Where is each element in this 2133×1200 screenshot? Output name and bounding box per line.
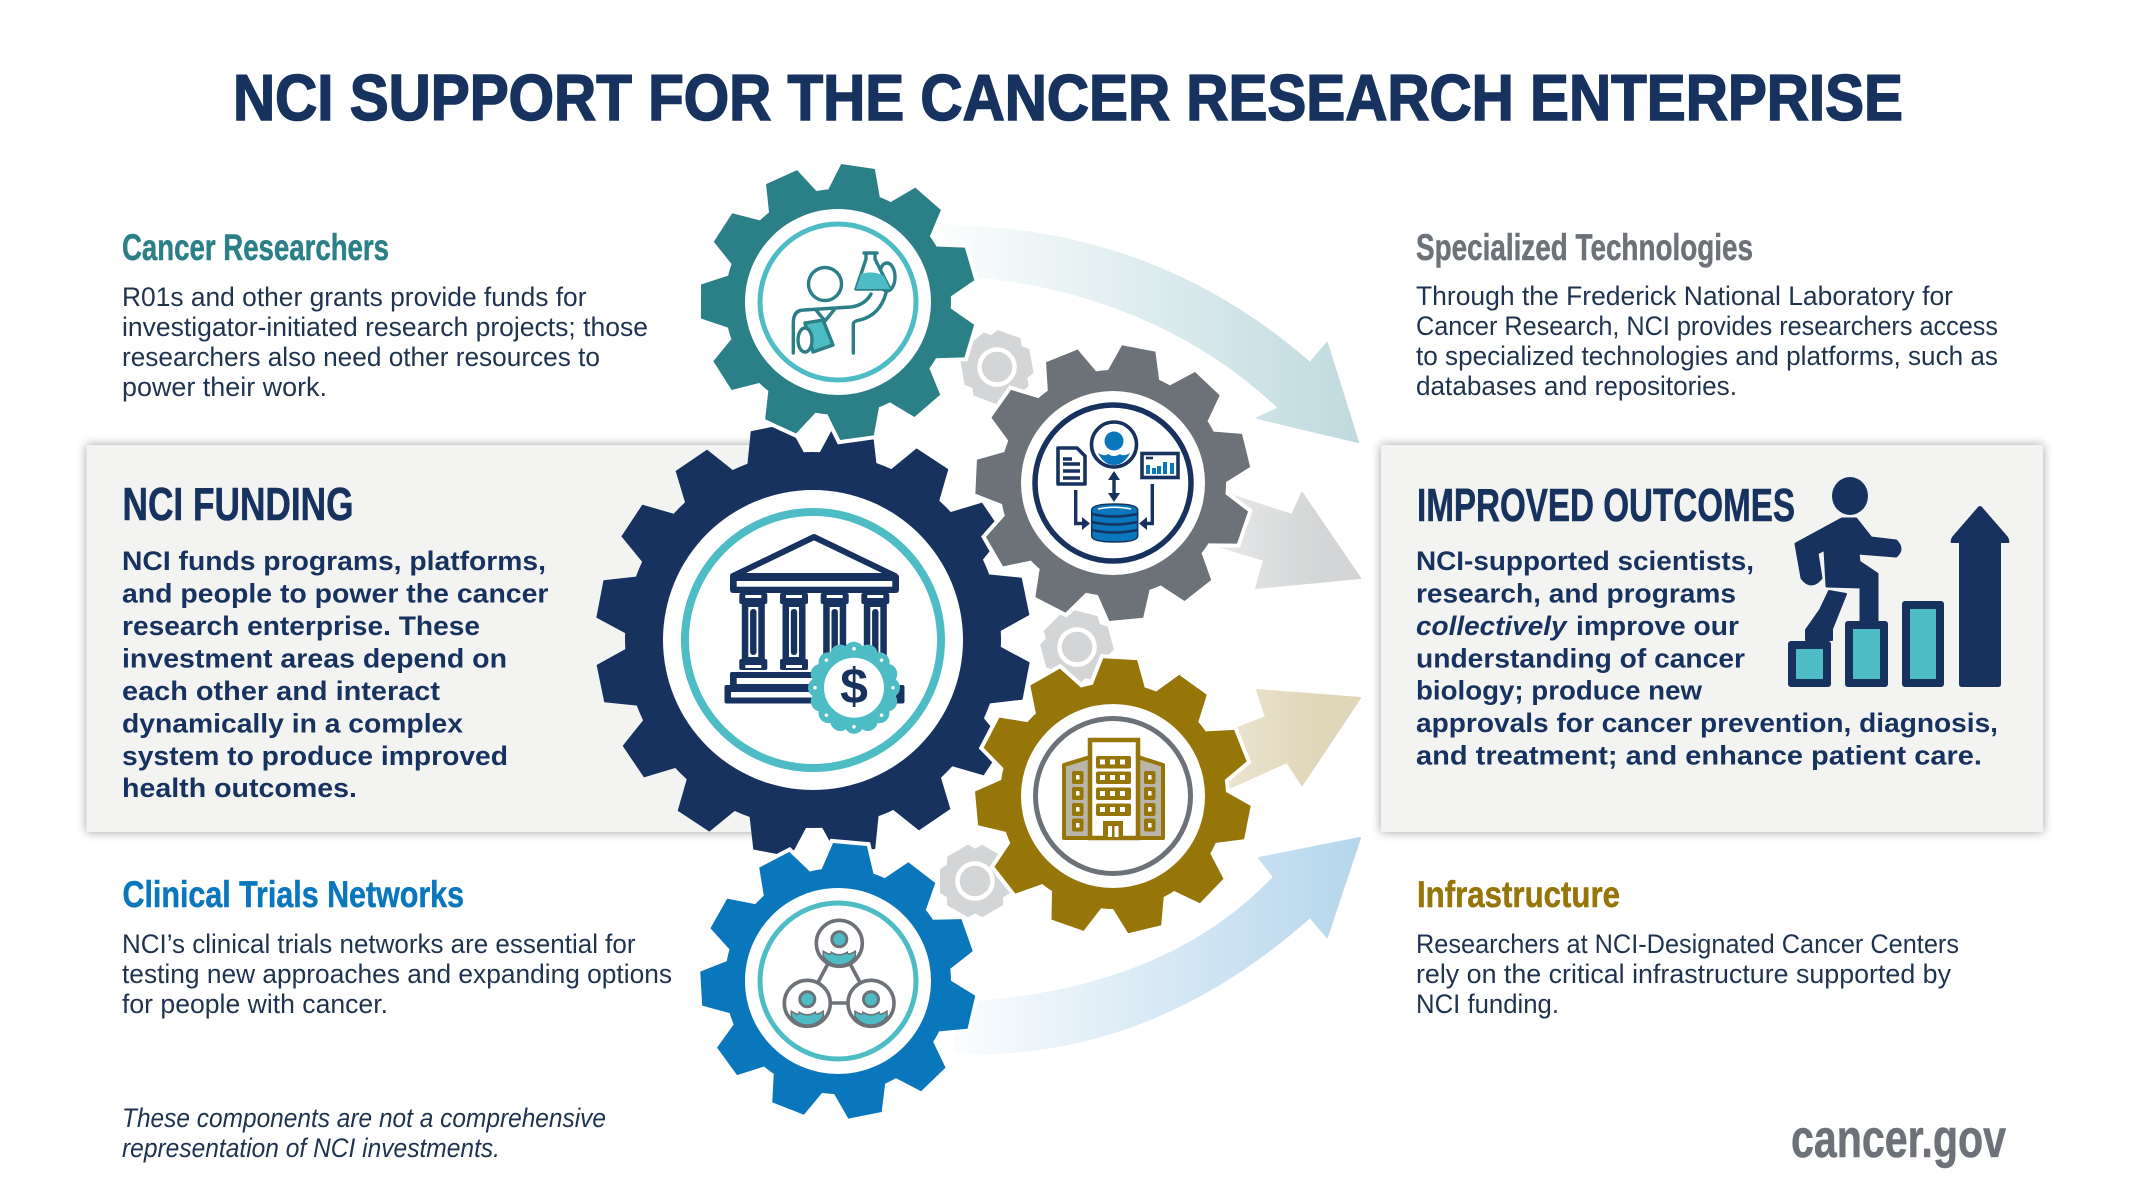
small gear 2 [1030, 603, 1124, 691]
icon: researcher with flask [793, 253, 895, 353]
icon: data sharing [1058, 422, 1178, 542]
icon: network of people [784, 920, 894, 1026]
text block: clinical trials networks: for people with cancer. [122, 989, 388, 1019]
text block: infrastructure: Researchers at NCI-Designated Cancer Centers [1416, 929, 1959, 959]
side wings [1064, 757, 1163, 838]
person head [1832, 477, 1868, 515]
text block: NCI funding: each other and interact [122, 676, 440, 706]
gear: NCI funding [559, 386, 1067, 894]
text block: specialized technologies: Through the Frederick National Laboratory for [1416, 281, 1953, 311]
logo text: cancer.gov: cancer.gov [1791, 1109, 2006, 1169]
bar 3 [1902, 601, 1944, 687]
up arrow [1951, 506, 2009, 687]
gear: cancer researchers [680, 146, 996, 460]
panel: NCI funding [86, 445, 786, 832]
document [1058, 448, 1085, 484]
wing windows [1072, 771, 1156, 832]
gear: specialized technologies [950, 322, 1276, 645]
heading: NCI funding: NCI FUNDING [122, 478, 354, 530]
small gear 3 [923, 831, 1027, 931]
steps [724, 672, 904, 704]
text block: clinical trials networks [122, 874, 672, 1019]
columns [739, 593, 889, 670]
bar 2 [1845, 621, 1888, 687]
text block: infrastructure [1416, 874, 1959, 1019]
heading: improved outcomes: IMPROVED OUTCOMES [1417, 479, 1795, 531]
text block: clinical trials networks: testing new approaches and expanding options [122, 959, 672, 989]
dollar badge [808, 641, 900, 734]
panel: improved outcomes [1381, 445, 2043, 832]
text block: NCI funding: health outcomes. [122, 773, 357, 803]
arrow: gold to outcomes [1200, 690, 1360, 790]
gear: clinical trials networks [687, 832, 989, 1131]
heading: specialized technologies: Specialized Technologies [1416, 227, 1753, 268]
text block: specialized technologies: databases and repositories. [1416, 371, 1737, 401]
arrows [1076, 473, 1152, 524]
text block: clinical trials networks: NCI’s clinical trials networks are essential for [122, 929, 636, 959]
database [1092, 504, 1138, 542]
text block: cancer researchers: R01s and other grants provide funds for [122, 282, 586, 312]
door [1103, 821, 1123, 838]
heading: infrastructure: Infrastructure [1417, 874, 1620, 915]
footnote: representation of NCI investments. [122, 1133, 500, 1163]
text block: specialized technologies: Cancer Research, NCI provides researchers access [1416, 311, 1998, 341]
text block: NCI funding: research enterprise. These [122, 611, 480, 641]
title: NCI SUPPORT FOR THE CANCER RESEARCH ENTERPRISE [233, 61, 1903, 134]
gear: infrastructure [967, 652, 1259, 942]
text block: specialized technologies: to specialized technologies and platforms, such as [1416, 341, 1998, 371]
text block: infrastructure: rely on the critical infrastructure supported by [1416, 959, 1951, 989]
text block: improved outcomes: understanding of cancer [1416, 644, 1745, 674]
icon: building [1064, 740, 1163, 838]
arrow: blue to outcomes [955, 838, 1360, 1053]
text block: improved outcomes: approvals for cancer prevention, diagnosis, [1416, 708, 1998, 738]
text block: cancer researchers: investigator-initiated research projects; those [122, 312, 648, 342]
chart panel [1142, 454, 1178, 478]
footnote [122, 1103, 606, 1163]
text block: NCI funding: dynamically in a complex [122, 708, 463, 738]
text block: cancer researchers [122, 227, 648, 402]
icon: bank with dollar [724, 537, 904, 734]
text block: specialized technologies [1416, 227, 1998, 401]
person circle [1092, 422, 1136, 467]
arrow: gray to outcomes [1215, 490, 1360, 588]
person rear leg [1806, 591, 1846, 640]
bank roof [733, 537, 895, 576]
footnote: These components are not a comprehensive [122, 1103, 606, 1133]
text block: improved outcomes: NCI-supported scientists, [1416, 546, 1754, 576]
person body [1796, 519, 1900, 621]
text block: improved outcomes: and treatment; and enhance patient care. [1416, 740, 1982, 770]
small gear 1 [948, 321, 1046, 413]
dollar badge: $ [840, 659, 868, 715]
heading: clinical trials networks: Clinical Trials Networks [122, 874, 464, 915]
icon: person climbing bars [1788, 477, 2009, 687]
text block: NCI funding: NCI funds programs, platforms, [122, 546, 546, 576]
text block: improved outcomes: collectively [1416, 611, 1569, 641]
text block: NCI funding [122, 478, 549, 803]
heading: cancer researchers: Cancer Researchers [122, 227, 389, 268]
text block: NCI funding: and people to power the cancer [122, 578, 549, 608]
text block: cancer researchers: researchers also need other resources to [122, 342, 600, 372]
bar 1 [1788, 641, 1831, 687]
text block: cancer researchers: power their work. [122, 372, 327, 402]
arrow: teal to outcomes [940, 226, 1358, 442]
text block: improved outcomes [1416, 479, 1998, 770]
tower windows [1096, 756, 1131, 816]
entablature [730, 574, 899, 593]
text block: improved outcomes: research, and programs [1416, 578, 1736, 608]
text block: NCI funding: system to produce improved [122, 741, 508, 771]
tower [1090, 740, 1138, 838]
text block: improved outcomes: improve our [1576, 611, 1740, 641]
text block: improved outcomes: biology; produce new [1416, 676, 1703, 706]
text block: infrastructure: NCI funding. [1416, 989, 1559, 1019]
text block: NCI funding: investment areas depend on [122, 644, 507, 674]
